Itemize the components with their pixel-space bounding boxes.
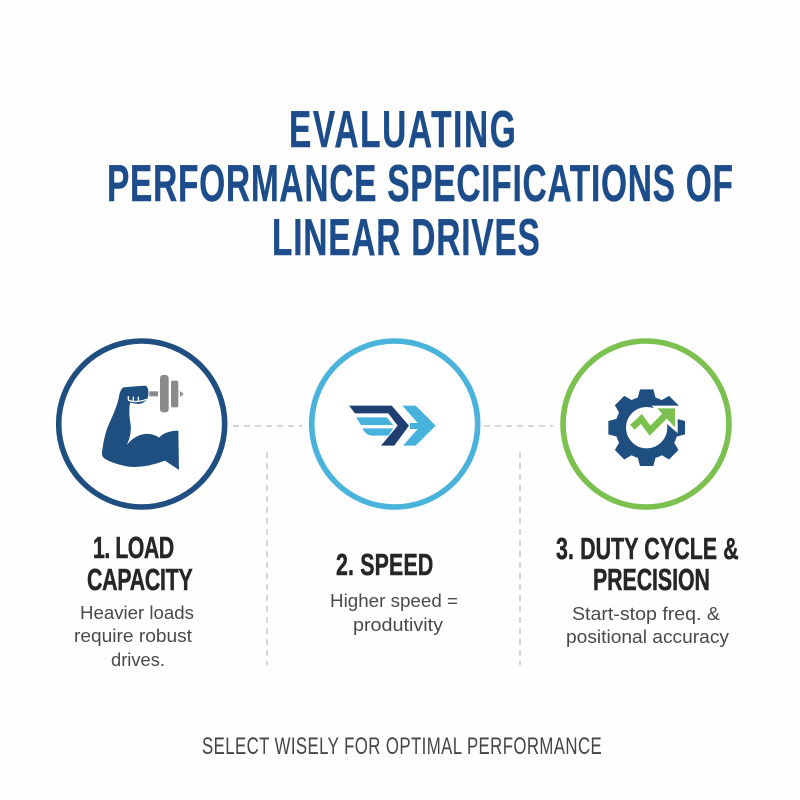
title: LINEAR DRIVES [272, 210, 540, 267]
panel: load capacity [59, 341, 225, 670]
text: speed description [330, 590, 458, 635]
heading: 1. load capacity: 1. LOAD [93, 530, 174, 565]
panel: speed [312, 341, 478, 635]
icon: winged speed arrow [349, 406, 436, 446]
title: PERFORMANCE SPECIFICATIONS OF [107, 156, 733, 213]
text: duty cycle description: Start-stop freq. & [572, 603, 721, 624]
panel: duty cycle and precision [556, 341, 739, 647]
footer tagline: SELECT WISELY FOR OPTIMAL PERFORMANCE [202, 733, 602, 760]
heading: 2. speed: 2. SPEED [336, 547, 433, 582]
icon ring: speed [312, 341, 478, 507]
heading: 1. load capacity: CAPACITY [87, 562, 193, 597]
icon: flexed arm with dumbbell [102, 375, 184, 470]
icon ring: load capacity [59, 341, 225, 507]
heading: 3. duty cycle and precision: PRECISION [593, 562, 710, 597]
text: duty cycle description: positional accuracy [566, 626, 730, 647]
text: load capacity description: drives. [111, 649, 165, 670]
heading: 3. duty cycle and precision: 3. DUTY CYCLE & [556, 531, 739, 566]
text: duty cycle description [566, 603, 730, 647]
title [107, 102, 733, 267]
text: load capacity description: Heavier loads [80, 602, 194, 623]
text: speed description: produtivity [353, 614, 444, 635]
icon ring: duty cycle [563, 341, 729, 507]
text: load capacity description: require robust [74, 625, 192, 646]
text: load capacity description [74, 602, 194, 670]
heading: 3. duty cycle and precision [556, 531, 739, 597]
heading: 1. load capacity [87, 530, 193, 597]
title: EVALUATING [289, 102, 516, 159]
text: speed description: Higher speed = [330, 590, 458, 611]
icon: gear with rising arrow [608, 389, 685, 466]
